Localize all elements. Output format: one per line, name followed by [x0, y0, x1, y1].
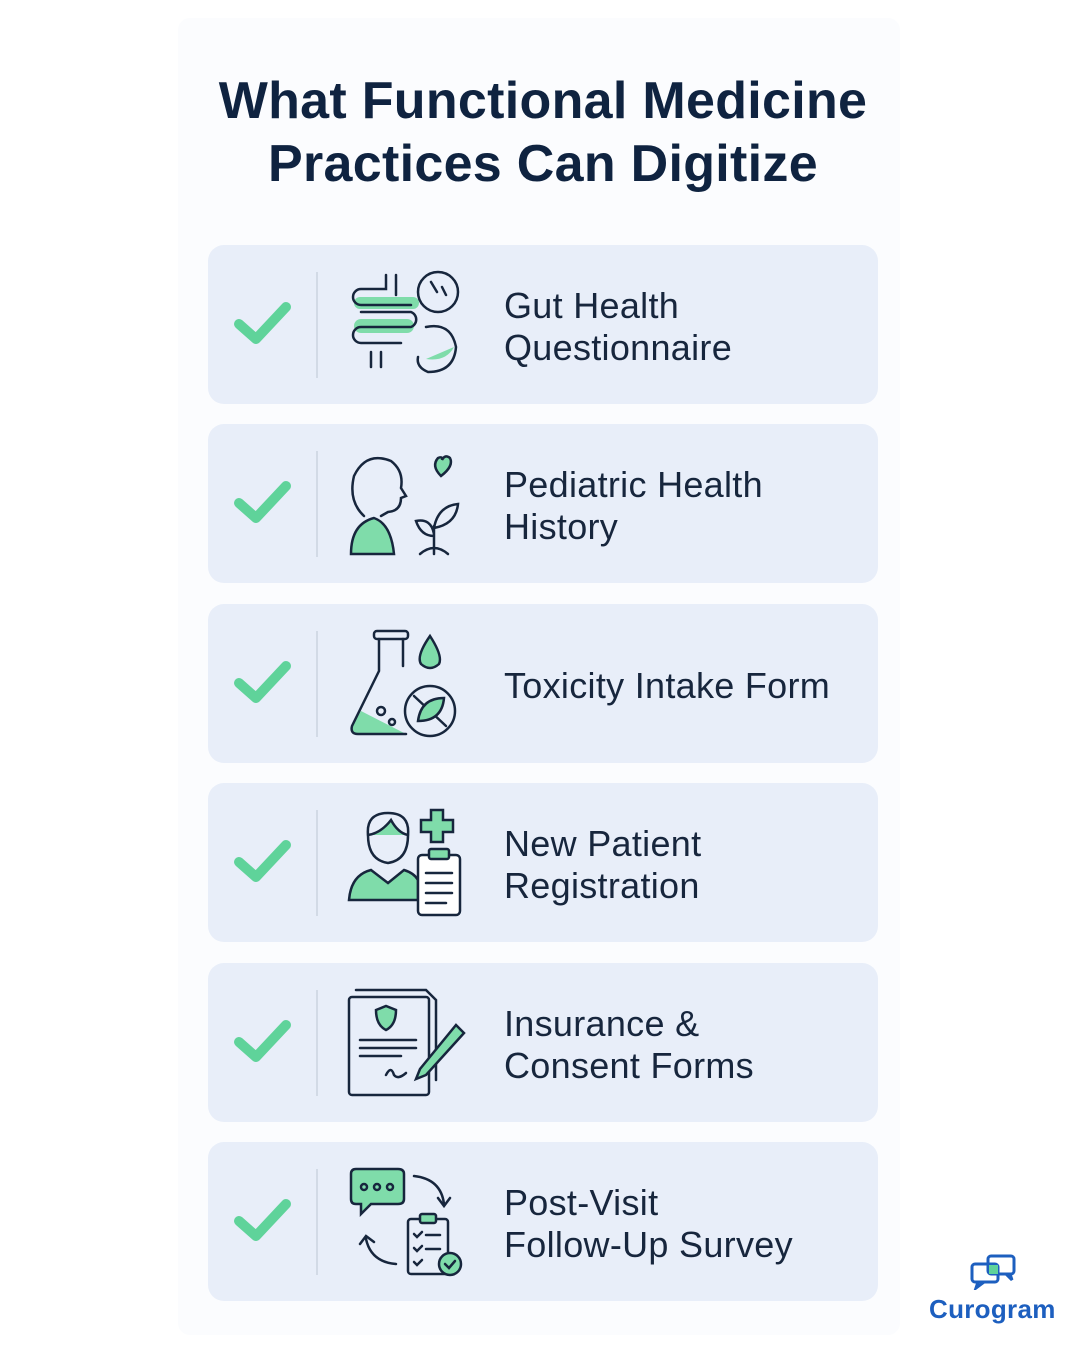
text: Toxicity Intake Form [504, 664, 830, 706]
card: pediatric [208, 424, 878, 583]
text [504, 822, 701, 906]
text [504, 464, 763, 546]
logo: Curogram [929, 1254, 1056, 1324]
card: gut health [208, 245, 878, 404]
icon: check [234, 481, 291, 523]
text: Insurance & [504, 1002, 699, 1044]
icon: document [348, 988, 466, 1096]
title: Practices Can Digitize [268, 135, 818, 193]
icon: check [234, 661, 291, 703]
text: History [504, 506, 618, 546]
text: Post-Visit [504, 1182, 658, 1222]
background panel [178, 18, 900, 1335]
icon: flask [350, 630, 456, 738]
icon: gut [352, 270, 460, 374]
text [504, 284, 732, 368]
text: Registration [504, 864, 700, 906]
text: Follow-Up Survey [504, 1224, 793, 1264]
icon: check [234, 302, 291, 344]
icon: check [234, 1199, 291, 1241]
icon: check [234, 1020, 291, 1062]
text [504, 1002, 754, 1086]
text: Questionnaire [504, 326, 732, 368]
title [218, 72, 867, 193]
icon: patient [348, 808, 462, 916]
text: New Patient [504, 822, 701, 864]
text: Pediatric Health [504, 464, 763, 504]
icon: check [234, 840, 291, 882]
text: Consent Forms [504, 1044, 754, 1086]
card: follow-up [208, 1142, 878, 1301]
icon: chat bubbles [970, 1254, 1016, 1290]
card: insurance [208, 963, 878, 1122]
card: toxicity [208, 604, 878, 763]
logo: Curogram: Curogram [929, 1294, 1056, 1324]
text [504, 1182, 793, 1264]
text: Gut Health [504, 284, 679, 326]
icon: survey [350, 1168, 462, 1276]
icon: child [350, 455, 460, 556]
card: new patient [208, 783, 878, 942]
title: What Functional Medicine [219, 72, 867, 130]
